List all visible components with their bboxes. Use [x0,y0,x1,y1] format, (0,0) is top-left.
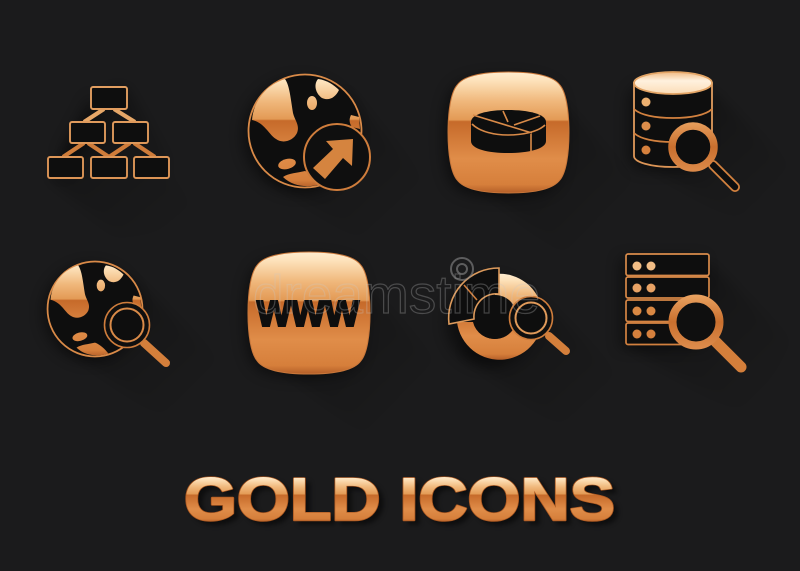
icon: hierarchy network [48,87,225,235]
watermark: dreamstime [253,265,540,325]
pie chart symbol [471,110,546,153]
title shadow: GOLD ICONS [189,470,620,537]
icon: globe with arrow [243,74,425,240]
watermark logo [451,258,473,280]
title: GOLD ICONS [184,466,615,533]
magnifier [510,296,566,351]
icon: globe search [43,262,220,420]
icon: donut chart search [446,268,620,430]
icon: database search [628,72,790,225]
magnifier [672,126,735,187]
title: GOLD ICONS [184,466,615,533]
arrow [313,139,353,179]
icon: www button [245,252,435,435]
www label: www [256,283,359,336]
icon: pie chart button [444,72,635,255]
icon: server search [620,254,790,425]
magnifier [672,298,741,367]
magnifier [104,302,166,363]
